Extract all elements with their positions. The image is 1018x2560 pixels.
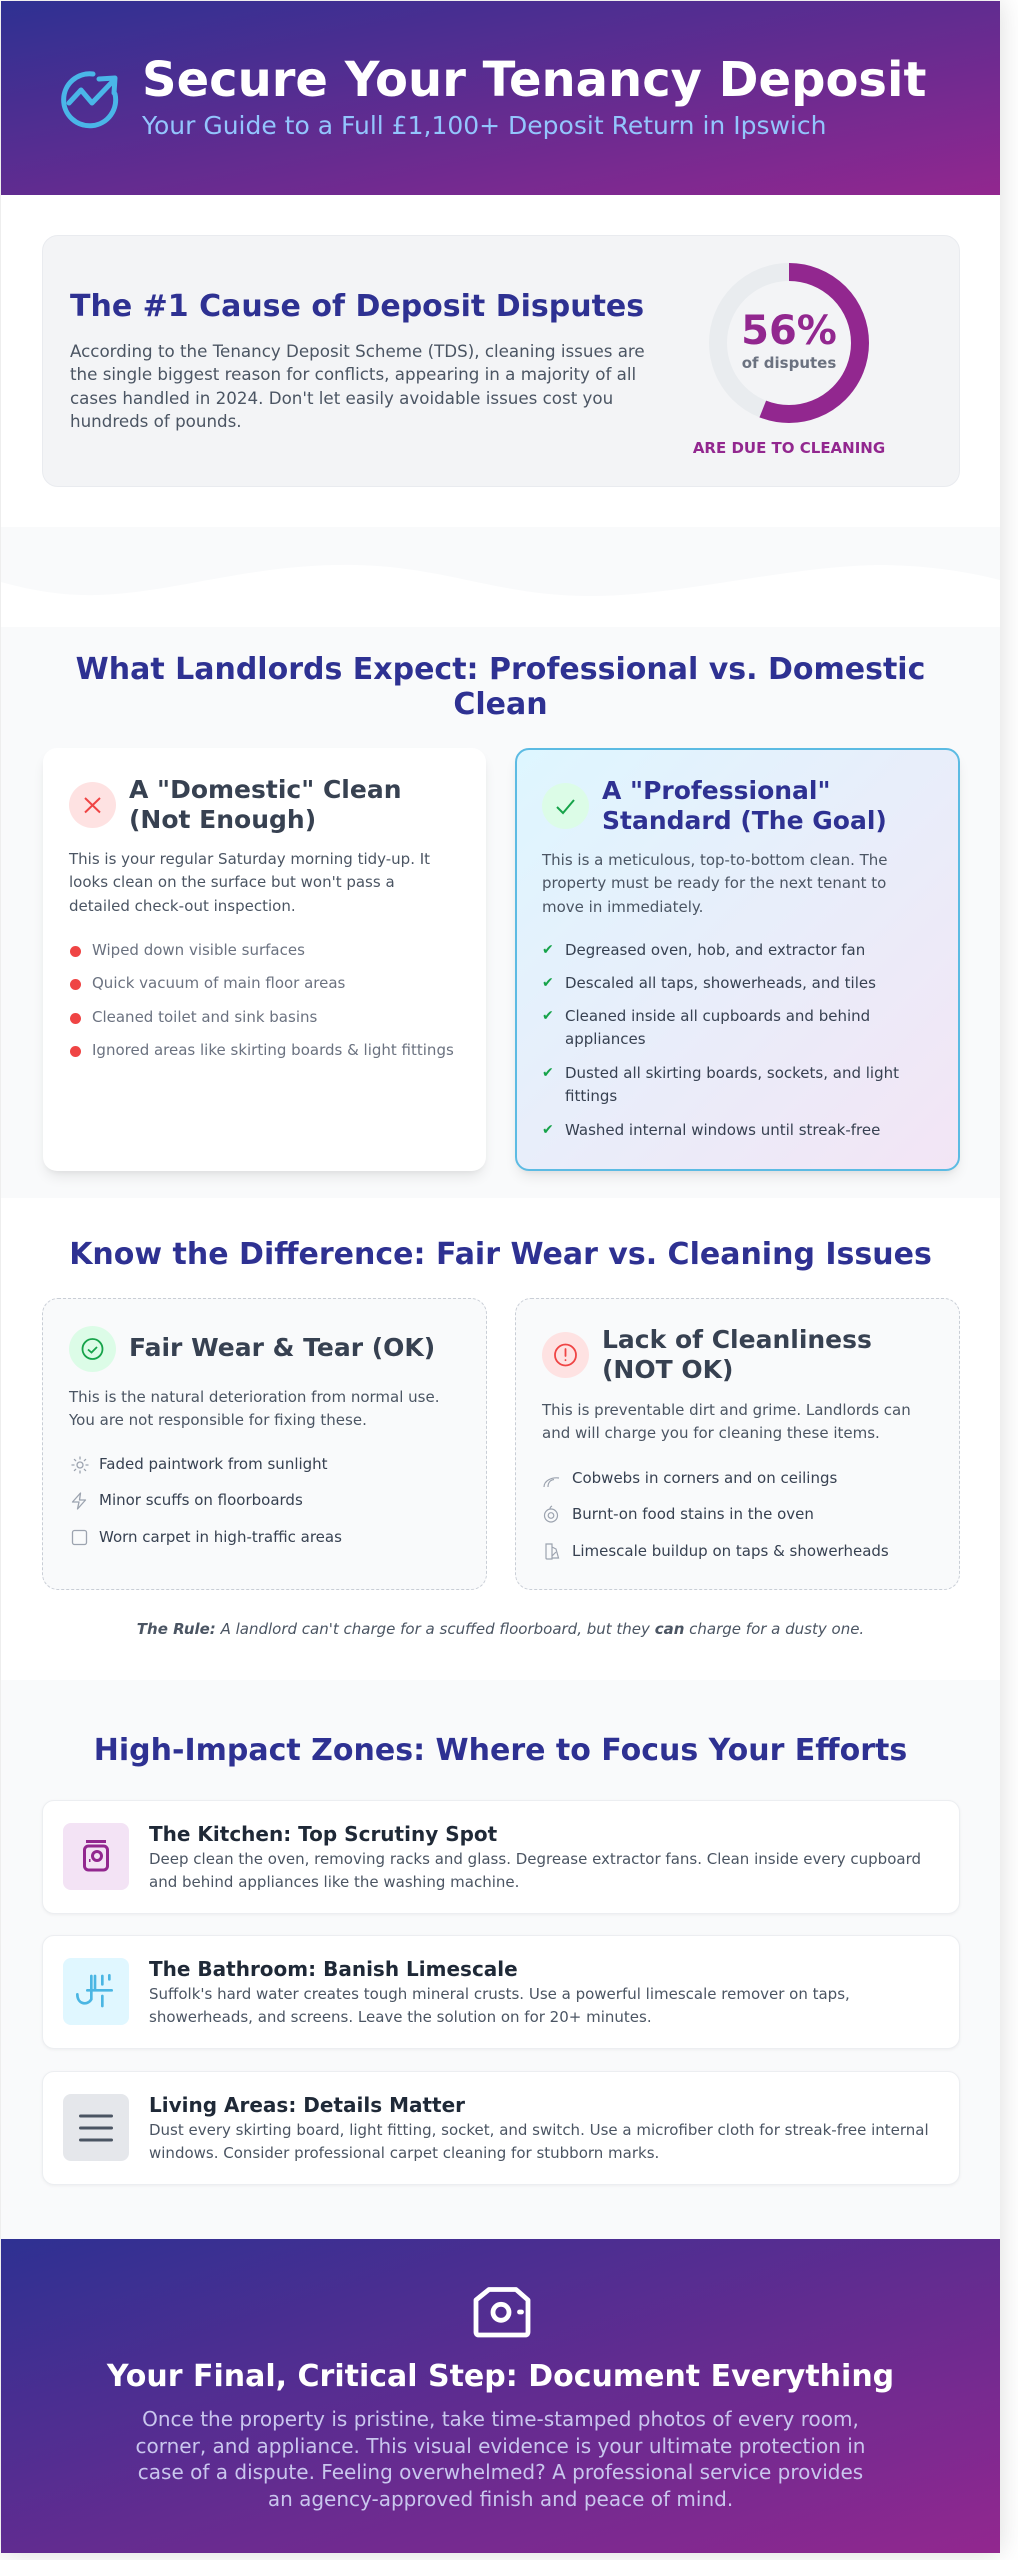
icon: green check circle [69, 1326, 116, 1372]
domestic list: Quick vacuum of main floor areas [92, 974, 345, 992]
title: Secure Your Tenancy Deposit [142, 52, 926, 108]
professional heading: Standard (The Goal) [602, 806, 887, 835]
icon: red cross [69, 782, 116, 828]
icon: camera [474, 2287, 530, 2338]
fair wear description: You are not responsible for fixing these. [69, 1411, 367, 1429]
footer text: corner, and appliance. This visual evidence is your ultimate protection in [136, 2434, 865, 2458]
professional list: ✔ [542, 1065, 554, 1081]
body text: cause explanation: According to the Tenancy Deposit Scheme (TDS), cleaning issues are [70, 341, 645, 361]
donut footnote: ARE DUE TO CLEANING [693, 439, 885, 457]
panel: professional standard [515, 748, 960, 1171]
icon: green check [542, 783, 589, 829]
header banner [1, 1, 1000, 195]
domestic description: detailed check-out inspection. [69, 897, 296, 915]
professional list: appliances [565, 1030, 646, 1048]
fair wear description [68, 1388, 440, 1429]
domestic list: Cleaned toilet and sink basins [92, 1008, 317, 1026]
cleanliness description: and will charge you for cleaning these items. [542, 1424, 880, 1442]
fair wear heading: Fair Wear & Tear (OK) [129, 1333, 435, 1362]
panel: lack of cleanliness [515, 1298, 960, 1590]
cleanliness heading [602, 1325, 872, 1384]
professional description [542, 851, 888, 916]
kitchen title: The Kitchen: Top Scrutiny Spot [149, 1822, 497, 1846]
heading: what landlords expect [76, 652, 925, 722]
icon: sun [71, 1456, 89, 1474]
body text: cause explanation [70, 341, 645, 431]
icon: rising chart logo [61, 71, 118, 128]
professional description: This is a meticulous, top-to-bottom clean. The [542, 851, 888, 869]
icon: cobweb [543, 1477, 559, 1487]
footer text: an agency-approved finish and peace of mind. [268, 2487, 733, 2511]
icon: kitchen jar [63, 1823, 129, 1890]
bathroom text [149, 1985, 850, 2026]
cleanliness description: This is preventable dirt and grime. Landlords can [542, 1401, 911, 1419]
cleanliness list: Cobwebs in corners and on ceilings [572, 1469, 837, 1487]
professional description: property must be ready for the next tenant to [542, 874, 886, 892]
domestic description: looks clean on the surface but won't pass a [69, 873, 395, 891]
icon: split block [545, 1543, 560, 1560]
domestic heading: A "Domestic" Clean [129, 775, 402, 804]
professional list: Descaled all taps, showerheads, and tiles [565, 974, 876, 992]
professional heading: A "Professional" [602, 776, 831, 805]
card: bathroom [42, 1935, 960, 2049]
professional heading [602, 776, 887, 835]
footer text: Once the property is pristine, take time-stamped photos of every room, [142, 2407, 859, 2431]
domestic description [68, 850, 430, 915]
professional description: move in immediately. [542, 898, 703, 916]
professional list: Degreased oven, hob, and extractor fan [565, 941, 865, 959]
icon: menu lines [63, 2094, 129, 2161]
donut caption: of disputes [742, 354, 836, 372]
professional list: ✔ [542, 1122, 554, 1138]
professional list: Washed internal windows until streak-free [565, 1121, 880, 1139]
body text: cause explanation: hundreds of pounds. [70, 411, 242, 431]
professional list: fittings [565, 1087, 617, 1105]
icon: red alert circle [542, 1332, 589, 1378]
heading: what landlords expect: Clean [453, 686, 548, 722]
subtitle: Your Guide to a Full £1,100+ Deposit Return in Ipswich [142, 111, 826, 140]
domestic heading [129, 775, 402, 834]
domestic list [70, 941, 454, 1059]
bathroom text: Suffolk's hard water creates tough mineral crusts. Use a powerful limescale remover on taps, [149, 1985, 850, 2003]
cleanliness list [543, 1469, 889, 1560]
footer heading: Your Final, Critical Step: Document Everything [107, 2359, 894, 2394]
body text: cause explanation: cases handled in 2024. Don't let easily avoidable issues cost you [70, 388, 613, 408]
fair wear list: Faded paintwork from sunlight [99, 1455, 328, 1473]
panel: number one cause [42, 235, 960, 487]
domestic list: Ignored areas like skirting boards & light fittings [92, 1041, 454, 1059]
living areas text: Dust every skirting board, light fitting, socket, and switch. Use a microfiber cloth for streak-free internal [149, 2121, 929, 2139]
domestic heading: (Not Enough) [129, 805, 316, 834]
fair wear description: This is the natural deterioration from normal use. [69, 1388, 440, 1406]
professional list: ✔ [542, 1008, 554, 1024]
cleanliness list: Burnt-on food stains in the oven [572, 1505, 814, 1523]
professional list: Cleaned inside all cupboards and behind [565, 1007, 870, 1025]
section: professional vs domestic [1, 627, 1000, 1198]
domestic description: This is your regular Saturday morning tidy-up. It [69, 850, 430, 868]
body text: cause explanation: the single biggest reason for conflicts, appearing in a majority of all [70, 364, 636, 384]
kitchen text: Deep clean the oven, removing racks and glass. Degrease extractor fans. Clean inside every cupboard [149, 1850, 921, 1868]
icon: burnt ring [544, 1506, 558, 1523]
bathroom title: The Bathroom: Banish Limescale [149, 1957, 518, 1981]
kitchen text: and behind appliances like the washing machine. [149, 1873, 519, 1891]
domestic list: Wiped down visible surfaces [92, 941, 305, 959]
fair wear list: Worn carpet in high-traffic areas [99, 1528, 342, 1546]
card: kitchen [42, 1800, 960, 1914]
footer text [136, 2407, 865, 2511]
fair wear list: Minor scuffs on floorboards [99, 1491, 303, 1509]
donut chart: 56 percent [709, 263, 869, 423]
professional list: Dusted all skirting boards, sockets, and light [565, 1064, 899, 1082]
heading: high impact zones: High-Impact Zones: Where to Focus Your Efforts [94, 1733, 907, 1768]
cleanliness description [542, 1401, 911, 1442]
footer banner [1, 2239, 1000, 2553]
professional list [542, 941, 899, 1139]
heading: know the difference: Know the Difference: Fair Wear vs. Cleaning Issues [69, 1237, 932, 1272]
cleanliness heading: Lack of Cleanliness [602, 1325, 872, 1354]
bathroom text: showerheads, and screens. Leave the solution on for 20+ minutes. [149, 2008, 652, 2026]
icon: square [72, 1530, 88, 1546]
cleanliness heading: (NOT OK) [602, 1355, 733, 1384]
professional list: ✔ [542, 942, 554, 958]
card: living areas [42, 2071, 960, 2185]
wave divider [1, 527, 1000, 627]
fair wear list [71, 1455, 342, 1546]
panel: domestic clean [43, 748, 486, 1171]
heading: number one cause: The #1 Cause of Deposit Disputes [70, 289, 644, 324]
cleanliness list: Limescale buildup on taps & showerheads [572, 1542, 889, 1560]
section: high impact zones [1, 1680, 1000, 2239]
icon: bathroom tap [63, 1958, 129, 2025]
living areas text: windows. Consider professional carpet cleaning for stubborn marks. [149, 2144, 659, 2162]
professional list: ✔ [542, 975, 554, 991]
callout: the rule: The Rule: A landlord can't charge for a scuffed floorboard, but they can charge for a dusty one. [137, 1620, 864, 1638]
kitchen text [149, 1850, 921, 1891]
heading: what landlords expect: What Landlords Expect: Professional vs. Domestic [76, 652, 925, 687]
living areas text [149, 2121, 929, 2162]
donut value: 56% [741, 308, 837, 354]
icon: lightning bolt [72, 1492, 86, 1510]
footer text: case of a dispute. Feeling overwhelmed? A professional service provides [138, 2460, 863, 2484]
living areas title: Living Areas: Details Matter [149, 2093, 465, 2117]
panel: fair wear and tear [42, 1298, 487, 1590]
